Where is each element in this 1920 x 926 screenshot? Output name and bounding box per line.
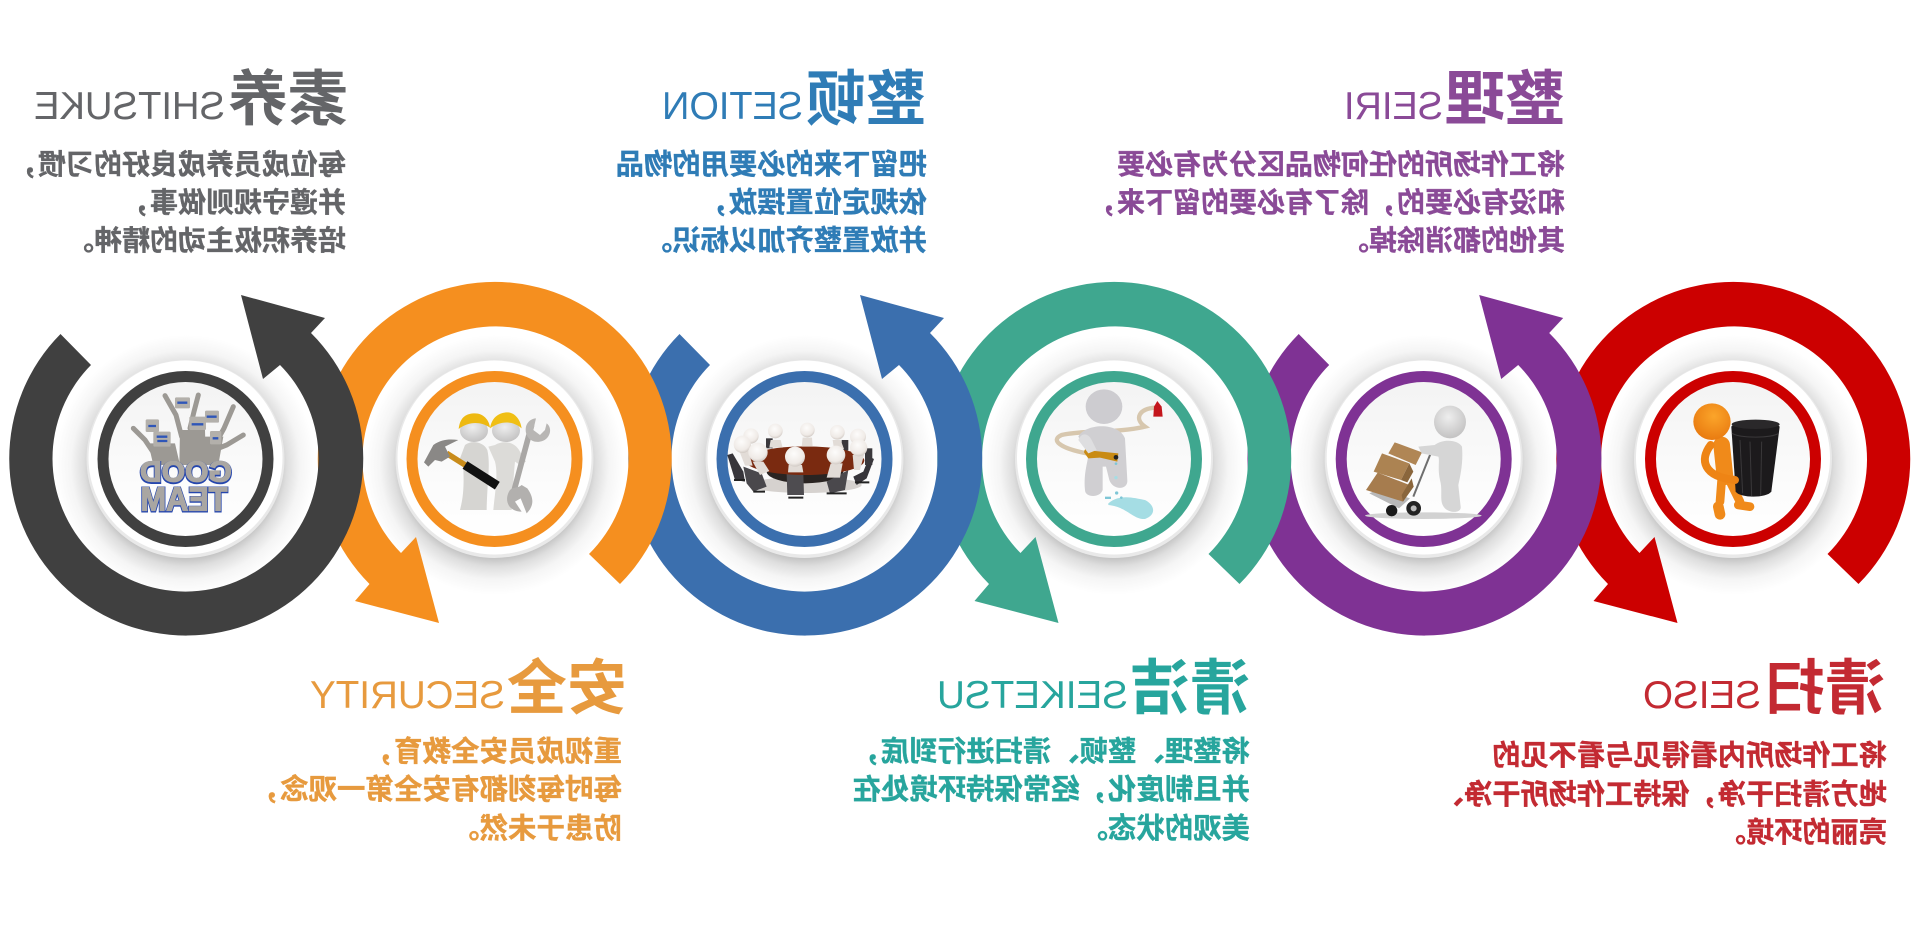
icon: orange figure carrying a trash can (1693, 403, 1780, 514)
body text: 防患于未然。 (451, 813, 622, 845)
panel: purple ring SEIRI (1247, 295, 1601, 636)
heading latin: SEISO: SEISO (1643, 674, 1761, 717)
text block: SEISO (1436, 655, 1887, 848)
icon: good team group: GOOD (140, 457, 232, 489)
icon: meeting around a round table (727, 423, 874, 498)
text block: SETION (616, 66, 927, 256)
text block: SEIRI (1089, 66, 1565, 256)
icon: two workers with hammer and wrench (424, 412, 550, 513)
body text: 培养积极主动的精神。 (66, 225, 346, 256)
body text: 重视成员安全教育， (365, 736, 622, 768)
body text: 将工作场所内看得见与看不见的 (1492, 739, 1887, 771)
arrow: orange circular arrow (318, 282, 672, 623)
body text: 和没有必要的，除了有必要的留下来， (1089, 187, 1565, 218)
body text: 亮丽的环境。 (1718, 816, 1887, 848)
arrow: blue circular arrow (628, 295, 982, 636)
icon: good team group: GOOD (140, 457, 232, 489)
panel: teal ring SEIKETSU (937, 282, 1291, 623)
heading: 素养: 素养 (228, 66, 348, 133)
panel: orange ring SECURITY (318, 282, 672, 623)
body text (10, 148, 346, 256)
heading latin: SETION: SETION (662, 85, 803, 128)
arrow: purple circular arrow (1247, 295, 1601, 636)
body text: 每时每刻都有安全第一观念， (251, 773, 622, 806)
body text: 依规定位置摆放， (701, 186, 927, 218)
text block: SEIKETSU (853, 655, 1250, 845)
body text: 并遵守规则做事， (122, 187, 346, 218)
heading: 清扫: 清扫 (1765, 655, 1885, 722)
heading latin: SEIRI: SEIRI (1344, 85, 1443, 128)
body text: 并且制度化，经常保持环境处在 (853, 774, 1250, 806)
arrow: dark circular arrow (9, 295, 363, 636)
panel: dark ring SHITSUKE (9, 295, 363, 636)
heading: 整顿: 整顿 (806, 66, 926, 133)
icon: good team group: TEAM (141, 481, 227, 518)
panel: red ring SEISO (1556, 282, 1910, 623)
heading latin: SECURITY: SECURITY (310, 674, 505, 717)
icon: good team group: TEAM (141, 482, 227, 519)
body text (1089, 149, 1565, 256)
body text: 地方清扫干净，保持工作场所干净、 (1436, 778, 1887, 810)
body text: 其他的都消除掉。 (1341, 225, 1565, 256)
body text: 将工作场所的任何物品区分为有必要 (1117, 149, 1565, 180)
heading latin: SEIKETSU: SEIKETSU (937, 674, 1128, 717)
body text: 并放置整齐加以标识。 (644, 224, 927, 256)
arrow: red circular arrow (1556, 282, 1910, 623)
text block: SECURITY (251, 655, 627, 845)
icon: figure with a hose and puddle (1057, 389, 1163, 519)
heading: 清洁: 清洁 (1130, 655, 1250, 722)
body text (1436, 739, 1887, 848)
body text (251, 736, 622, 845)
body text (853, 736, 1250, 845)
body text: 每位成员养成良好的习惯， (10, 148, 346, 180)
heading: 整理: 整理 (1445, 66, 1565, 133)
body text: 把留下来的必要用的物品 (616, 148, 927, 180)
icon: figure pushing a hand truck with boxes (1365, 406, 1482, 519)
icon: good team group (133, 395, 243, 519)
heading: 安全: 安全 (507, 655, 627, 722)
body text (616, 148, 927, 256)
body text: 美观的状态。 (1080, 813, 1250, 845)
body text: 将整理、整顿、清扫进行到底， (853, 736, 1250, 768)
arrow: teal circular arrow (937, 282, 1291, 623)
heading latin: SHITSUKE: SHITSUKE (34, 85, 225, 128)
text block: SHITSUKE (10, 66, 348, 256)
panel: blue ring SETION (628, 295, 982, 636)
